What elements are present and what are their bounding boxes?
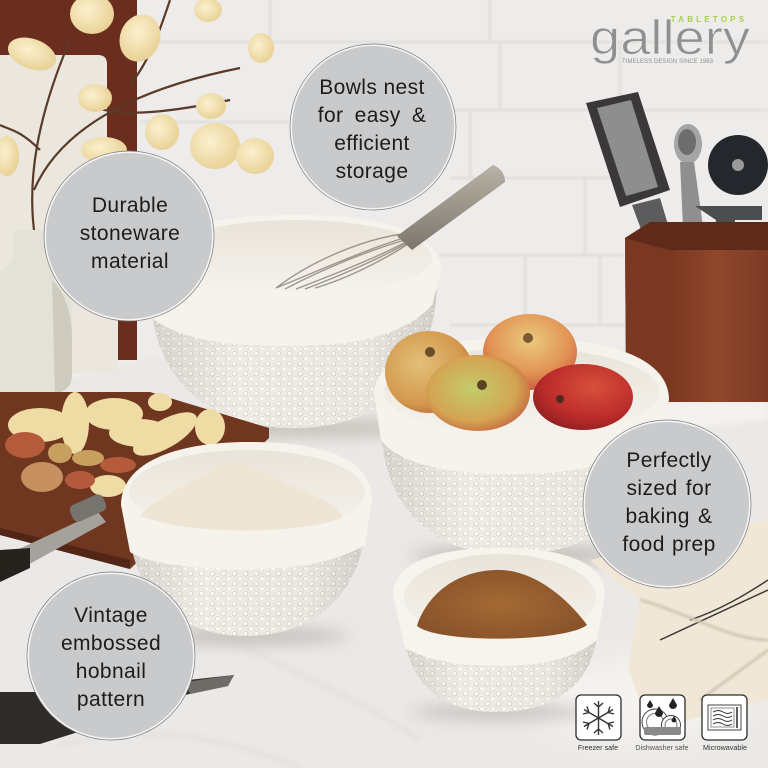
vase with dried branches xyxy=(0,0,274,395)
logo: gallery: gallery xyxy=(590,12,750,65)
wooden utensil holder xyxy=(625,222,768,402)
callout: bowls nest: for easy & xyxy=(318,104,426,127)
knife on counter xyxy=(0,675,234,744)
whisk xyxy=(276,234,408,289)
callout: vintage embossed: hobnail xyxy=(76,660,146,683)
icon: dishwasher safe: Dishwasher safe xyxy=(635,743,689,752)
logo: tabletops: TABLETOPS xyxy=(671,15,747,24)
utensils xyxy=(586,92,768,248)
grater xyxy=(586,92,670,207)
brick wall background xyxy=(0,0,768,400)
callout: bowls nest: storage xyxy=(336,160,408,183)
callout: vintage embossed xyxy=(27,572,195,740)
callout: durable stoneware material xyxy=(44,151,214,321)
callout: bowls nest: efficient xyxy=(334,132,410,155)
icon: freezer safe xyxy=(576,695,621,752)
callout: perfectly sized xyxy=(583,420,751,588)
logo: tagline: TIMELESS DESIGN SINCE 1983 xyxy=(622,59,714,65)
brand logo xyxy=(590,12,750,65)
callout: perfectly sized: food prep xyxy=(622,533,716,556)
kitchen towel xyxy=(590,520,768,730)
apples xyxy=(385,331,473,413)
marble counter xyxy=(0,358,768,768)
back mixing bowl with whisk xyxy=(150,165,505,437)
flour bowl xyxy=(121,442,372,643)
cutting board with apple slices and knife xyxy=(0,392,269,582)
callout: vintage embossed: embossed xyxy=(61,632,161,655)
callout: bowls nest xyxy=(290,44,456,210)
callout: vintage embossed: pattern xyxy=(77,688,145,711)
wooden board behind vase xyxy=(0,0,137,360)
pizza cutter xyxy=(708,135,768,195)
callout: durable stoneware material: stoneware xyxy=(80,222,180,245)
callout: bowls nest: Bowls nest xyxy=(319,76,425,99)
marble cutting board xyxy=(0,55,118,373)
icon: microwavable: Microwavable xyxy=(703,743,747,752)
callout: perfectly sized: baking & xyxy=(626,505,712,528)
callout: perfectly sized: sized for xyxy=(627,477,711,500)
icon: dishwasher safe xyxy=(635,695,689,752)
icon: microwavable xyxy=(702,695,747,752)
apple bowl xyxy=(374,314,669,563)
callout: durable stoneware material: material xyxy=(91,250,169,273)
callout: durable stoneware material: Durable xyxy=(92,194,168,217)
callout: vintage embossed: Vintage xyxy=(74,604,148,627)
brown sugar bowl xyxy=(393,548,605,718)
icon: freezer safe: Freezer safe xyxy=(578,743,618,752)
spoon xyxy=(674,124,702,164)
callout: perfectly sized: Perfectly xyxy=(626,449,712,472)
